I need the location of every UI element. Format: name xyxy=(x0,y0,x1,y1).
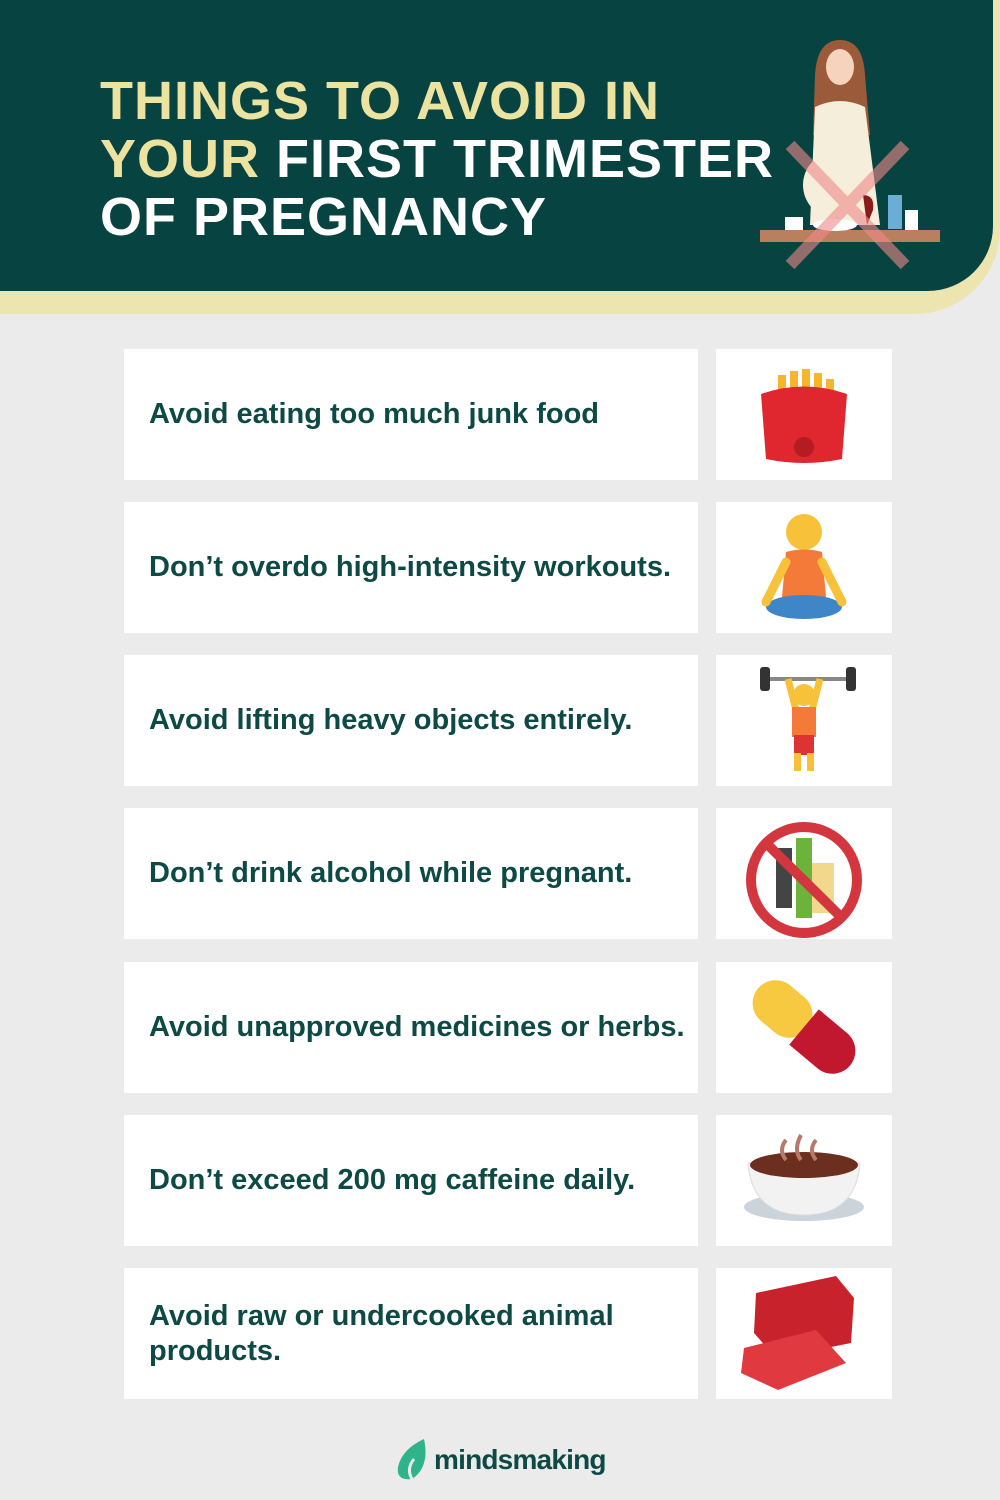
icon: raw meat xyxy=(716,1268,892,1399)
title: YOUR FIRST TRIMESTER xyxy=(100,129,774,189)
logo xyxy=(398,1439,606,1480)
item 4: Don’t drink alcohol while pregnant. xyxy=(149,857,632,889)
icon: no alcohol xyxy=(716,808,892,939)
item 3: Avoid lifting heavy objects entirely. xyxy=(149,704,632,736)
title: THINGS TO AVOID IN xyxy=(100,71,660,131)
icon: meditation xyxy=(716,502,892,633)
item 1 xyxy=(124,349,698,480)
item 6 xyxy=(124,1115,698,1246)
illustration: pregnant woman with table xyxy=(760,40,940,269)
item 7: products. xyxy=(149,1334,281,1366)
item 6: Don’t exceed 200 mg caffeine daily. xyxy=(149,1164,635,1196)
item 7 xyxy=(124,1268,698,1399)
item 3 xyxy=(124,655,698,786)
icon: pill xyxy=(716,962,892,1093)
title: OF PREGNANCY xyxy=(100,187,547,247)
icon: coffee xyxy=(716,1115,892,1246)
item 4 xyxy=(124,808,698,939)
item 5: Avoid unapproved medicines or herbs. xyxy=(149,1011,685,1043)
logo: mindsmaking xyxy=(434,1444,606,1475)
item 2 xyxy=(124,502,698,633)
item 5 xyxy=(124,962,698,1093)
title xyxy=(100,71,774,247)
icon: fries xyxy=(716,349,892,480)
item 7: Avoid raw or undercooked animal xyxy=(149,1300,614,1332)
header background xyxy=(0,0,1000,314)
item 2: Don’t overdo high-intensity workouts. xyxy=(149,551,671,583)
item 1: Avoid eating too much junk food xyxy=(149,398,599,430)
icon: weightlifter xyxy=(716,655,892,786)
